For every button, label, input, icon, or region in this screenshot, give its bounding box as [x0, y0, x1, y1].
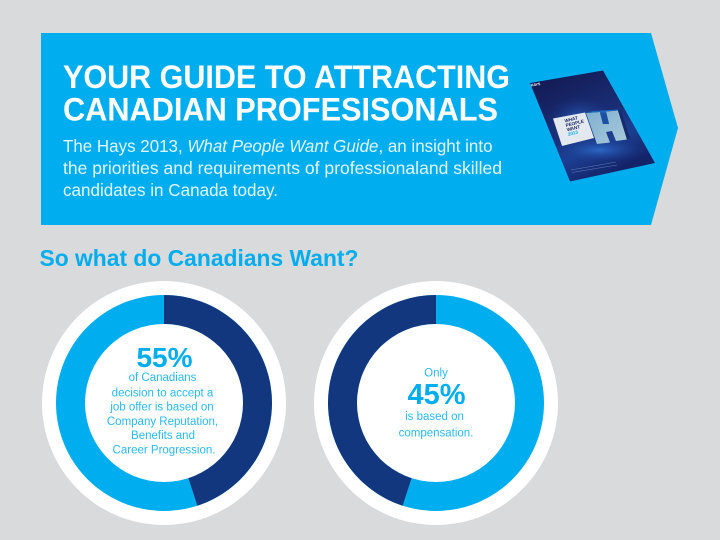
banner title: YOUR GUIDE TO ATTRACTING — [63, 59, 510, 95]
brochure title: WANT — [566, 124, 581, 132]
banner description — [63, 136, 502, 200]
donut chart: 45% — [314, 281, 558, 525]
section heading: So what do Canadians Want? — [40, 245, 358, 271]
brochure title: 2013 — [567, 129, 579, 137]
donut 55% text: of Canadians — [129, 372, 197, 384]
donut 45% text: is based on — [405, 411, 464, 423]
donut 55% text: Benefits and — [131, 430, 195, 442]
brochure image — [530, 70, 655, 182]
donut 55% text — [107, 342, 218, 456]
brochure title: PEOPLE — [565, 119, 584, 128]
banner description: The Hays 2013, What People Want Guide, an insight into — [63, 136, 492, 156]
donut 55% text: Company Reputation, — [107, 416, 218, 428]
brochure white panel — [553, 112, 594, 146]
brochure H block — [586, 110, 630, 144]
brochure small print — [571, 162, 617, 172]
donut 45% text — [399, 368, 473, 440]
donut 55% text: decision to accept a — [112, 388, 214, 400]
brochure logo: HAYS — [531, 82, 541, 87]
banner description: candidates in Canada today. — [63, 180, 278, 200]
donut 55% text: Career Progression. — [113, 444, 215, 456]
banner description: the priorities and requirements of professionaland skilled — [63, 158, 502, 178]
donut 55% text: job offer is based on — [109, 402, 214, 414]
banner — [41, 33, 678, 225]
donut 45% text: compensation. — [399, 428, 473, 440]
brochure title — [564, 114, 587, 137]
banner title line 2: CANADIAN PROFESISONALS — [63, 92, 498, 128]
brochure title: WHAT — [564, 115, 578, 123]
donut 55% text: 55% — [136, 342, 193, 373]
donut chart: 55% — [42, 281, 286, 525]
donut 45% text: Only — [424, 368, 448, 380]
donut 45% text: 45% — [407, 379, 466, 411]
